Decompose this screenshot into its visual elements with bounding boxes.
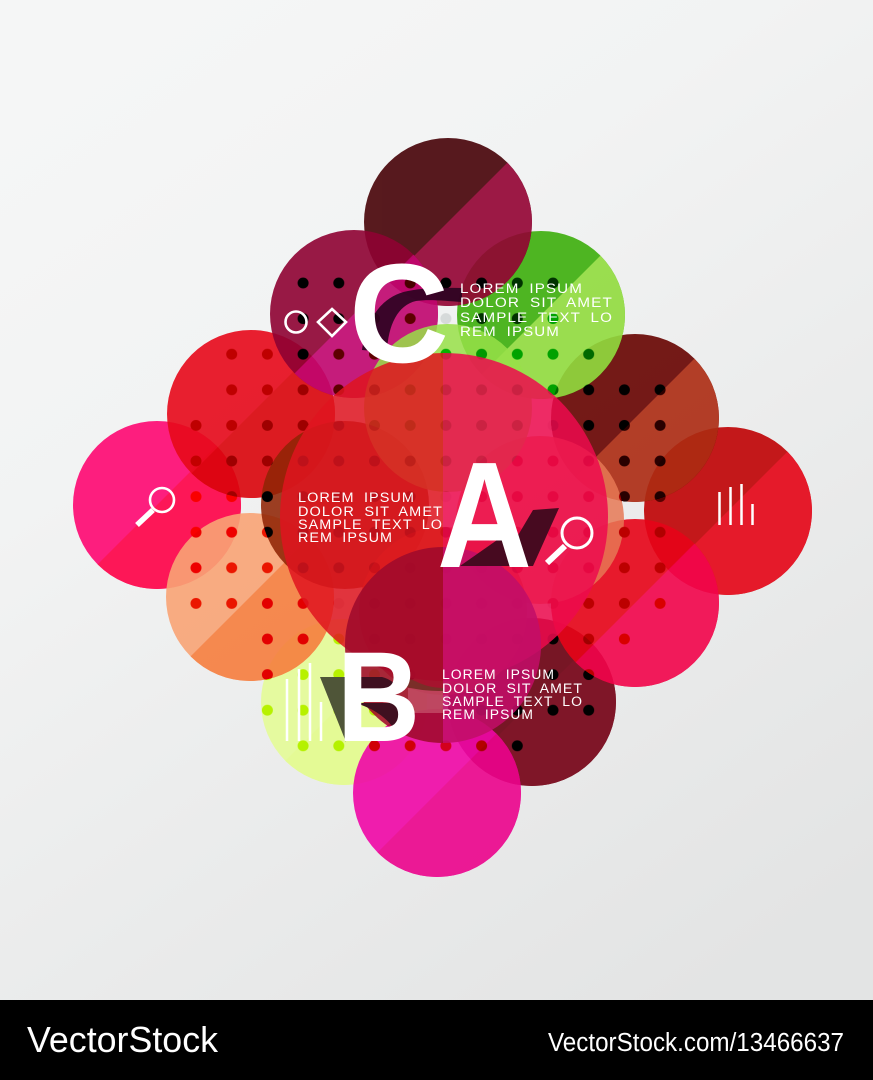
circle: brown right [551,334,719,502]
url text: VectorStock.com/13466637 [548,1029,844,1057]
shadow arrow behind A [460,508,559,566]
logo text: VectorStock [27,1019,219,1060]
text block C: DOLOR SIT AMET [460,295,613,310]
dot grid [178,265,678,764]
text block B: REM IPSUM [442,707,534,722]
block A [298,430,592,599]
block B [287,626,583,769]
circle: red far right [644,427,812,595]
circle: inner orange bottom [359,527,527,695]
circle: red upper left [167,330,335,498]
icon: bars yellow [287,663,321,741]
circle: yellow lower left [261,619,427,785]
icon: magnifier [547,518,592,563]
circle: crimson behind letter C [270,230,438,398]
circle: inner brown left [261,421,429,589]
circle: inner green top [364,324,532,492]
circle: orange lower left [166,513,334,681]
letter B: B [337,626,420,769]
circle: maroon lower right [448,618,616,786]
letter C: C [349,234,449,392]
circle: maroon and magenta lower centre [345,547,541,743]
text block B: SAMPLE TEXT LO [442,694,583,709]
text block C: SAMPLE TEXT LO [460,310,613,325]
circle: green upper right [457,231,625,399]
text block C: LOREM IPSUM [460,281,583,296]
shadow swoosh behind B [358,677,400,726]
icon: bars on red circle [720,484,752,525]
circle: magenta bottom [353,709,521,877]
text block B: LOREM IPSUM [442,667,555,682]
icon: circle [286,312,306,332]
icon: magnifier on pink circle [137,488,174,525]
block C [286,234,613,392]
text block C: REM IPSUM [460,324,560,339]
shadow wedge behind B [320,677,346,742]
footer bar [0,1000,873,1080]
circle: pink far left [73,421,241,589]
text block A: LOREM IPSUM [298,490,415,505]
text block A: SAMPLE TEXT LO [298,517,443,532]
circle: red pink lower right [551,519,719,687]
text block B: DOLOR SIT AMET [442,681,583,696]
text block B [442,667,583,722]
light band right of B [408,688,443,713]
shadow swoosh behind C [362,288,462,352]
circle: inner orange right [456,436,624,604]
big central circle [280,353,608,681]
circle: dark crimson top [364,138,532,306]
text block A [298,490,443,545]
letter A: A [437,430,532,599]
brown swoosh right of B [402,678,443,691]
text block A: REM IPSUM [298,530,393,545]
text block A: DOLOR SIT AMET [298,504,443,519]
text block C [460,281,613,339]
icon: diamond [318,309,346,336]
